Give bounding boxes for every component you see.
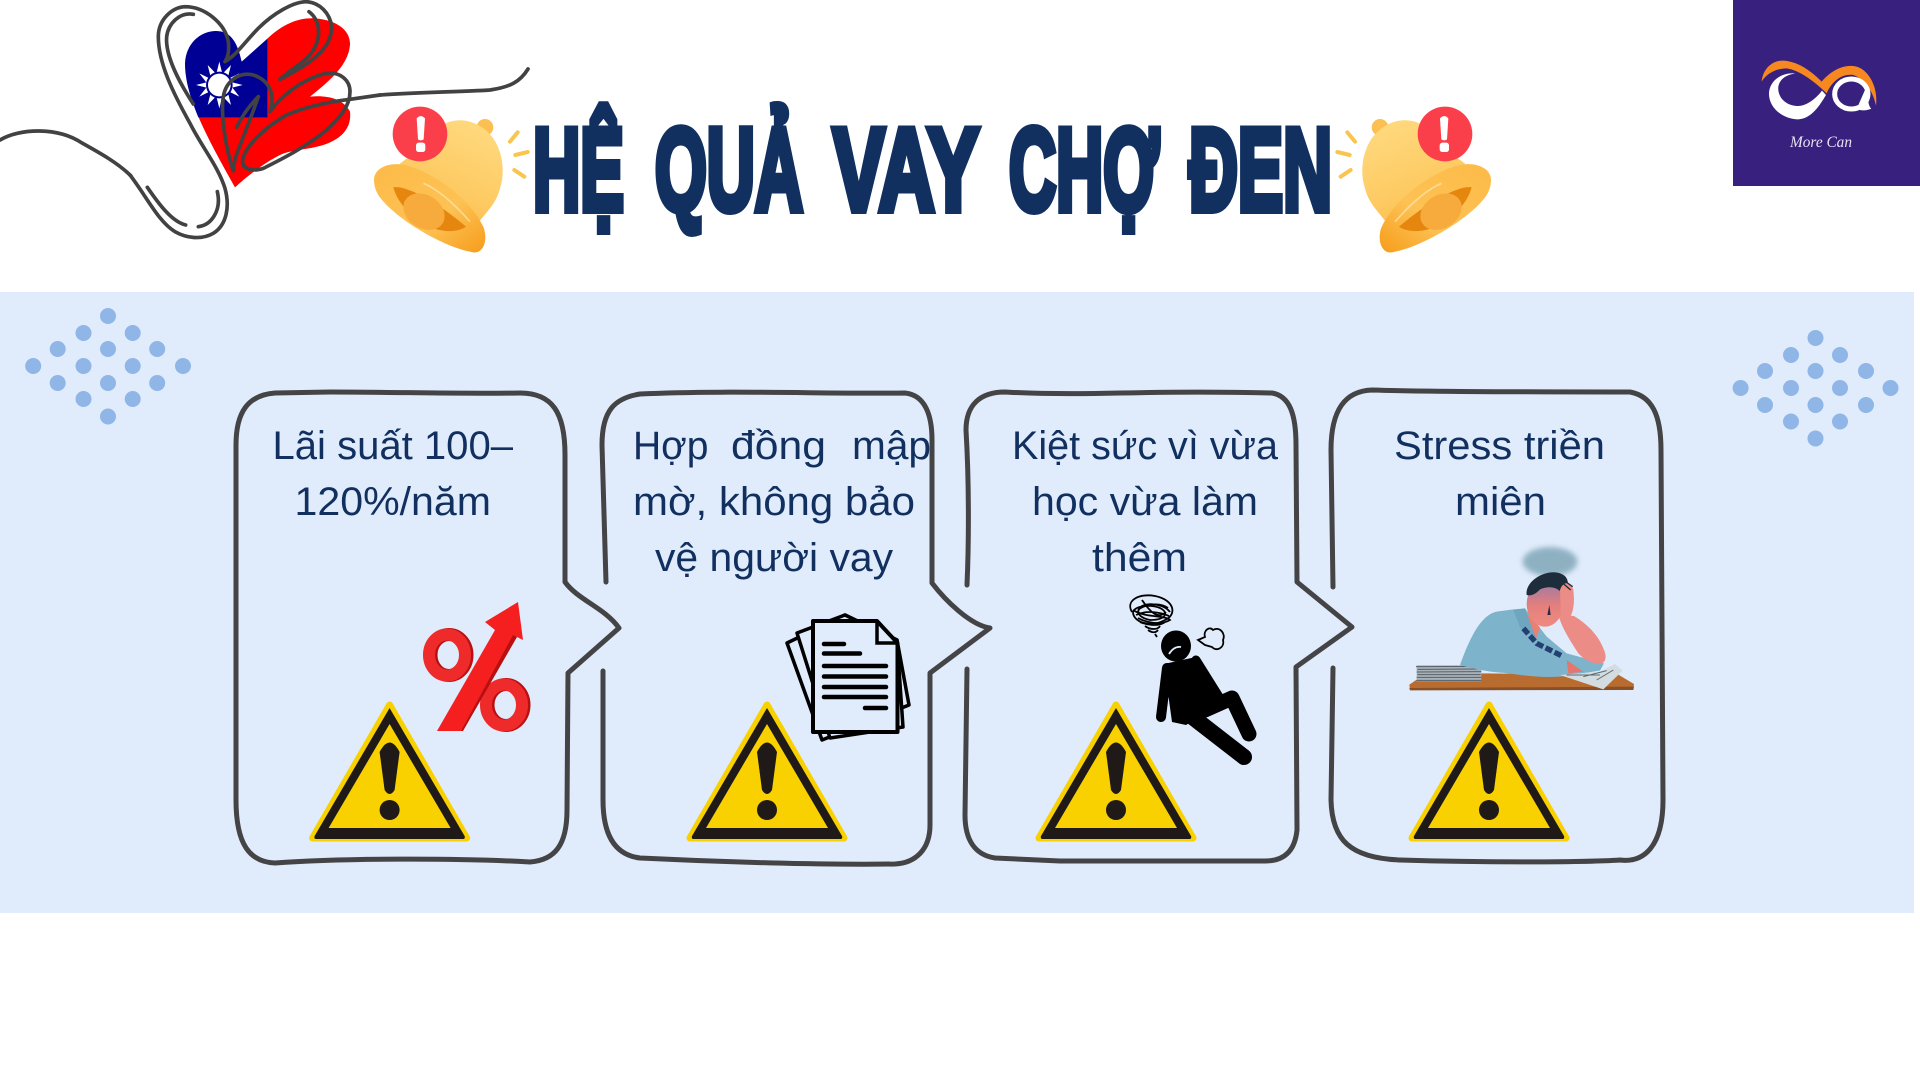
card 1 text: Lãi suất 100– — [272, 424, 514, 468]
card 3 text: học vừa làm — [1032, 480, 1258, 524]
decorative dots: right diamond — [1733, 330, 1898, 446]
card 2 text: đồng — [731, 424, 826, 468]
icon: rising percent — [429, 602, 524, 731]
title: ĐEN — [1189, 104, 1332, 235]
panel: card 2 opaque contract — [602, 392, 990, 864]
card 2 text: mập — [852, 424, 931, 468]
title: VAY — [833, 104, 979, 235]
card 2 outline with arrow — [602, 392, 990, 864]
panel: card 3 exhaustion — [965, 392, 1352, 861]
card 4 text: Stress triền — [1394, 424, 1605, 468]
panel: light blue background band — [0, 292, 1914, 913]
title: CHỢ — [1009, 104, 1159, 235]
card 4 text: miên — [1455, 480, 1546, 524]
logo: More Can — [1733, 0, 1920, 186]
card 2 text: Hợp — [633, 424, 708, 468]
icon: Taiwan flag heart with scribble line — [0, 2, 528, 238]
card 1 outline with arrow — [236, 392, 619, 863]
card 3 outline with arrow — [965, 392, 1352, 861]
icon: stack of documents — [787, 615, 909, 740]
card 3 text: Kiệt sức vì vừa — [1012, 424, 1279, 468]
card 2 text: mờ, không bảo — [633, 480, 915, 524]
card 3 text: thêm — [1092, 536, 1187, 580]
icon: warning triangle 2 — [690, 705, 844, 839]
card 1 text: 120%/năm — [294, 480, 491, 524]
decorative dots: left diamond — [25, 308, 191, 424]
card 3 text — [1012, 424, 1279, 580]
card 4 text — [1394, 424, 1605, 524]
panel: card 4 chronic stress — [1331, 390, 1663, 862]
icon: warning triangle 3 — [1039, 705, 1193, 839]
title — [533, 104, 1332, 235]
icon: stressed person at desk — [1409, 547, 1634, 690]
title: HỆ — [533, 104, 624, 235]
title: QUẢ — [655, 104, 803, 235]
icon: bell right — [1337, 107, 1491, 253]
panel: card 1 interest rate — [236, 392, 619, 863]
card 4 outline — [1331, 390, 1663, 862]
logo: More Can: More Can — [1789, 134, 1852, 151]
icon: bell left — [374, 107, 528, 253]
icon: exhausted falling person — [1130, 595, 1249, 757]
card 2 text — [633, 424, 931, 580]
card 1 text — [272, 424, 514, 524]
card 2 text: vệ người vay — [655, 536, 893, 580]
icon: warning triangle 1 — [313, 705, 467, 839]
icon: warning triangle 4 — [1412, 705, 1566, 839]
